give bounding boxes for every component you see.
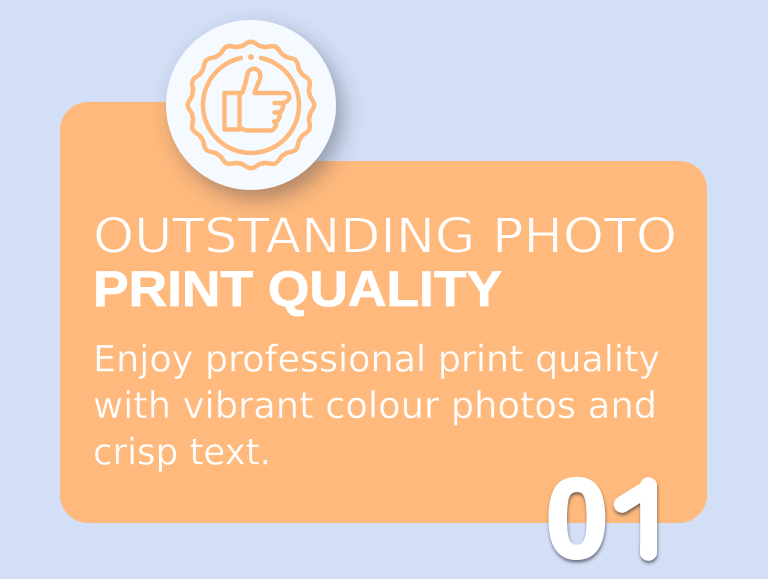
number 01: 0 <box>546 456 608 579</box>
body text: with vibrant colour photos and <box>93 384 657 427</box>
inner ring with gap <box>203 58 299 153</box>
heading <box>93 208 677 317</box>
panel: orange card <box>60 102 707 523</box>
number 01: 1 <box>616 456 679 579</box>
icon: thumbs-up quality badge <box>166 20 336 190</box>
heading line 2: PRINT QUALITY <box>93 261 502 317</box>
number 01 <box>546 476 660 566</box>
badge circle <box>166 20 336 190</box>
scalloped seal outline <box>188 42 314 168</box>
heading line 1: OUTSTANDING PHOTO <box>93 208 677 264</box>
body text: Enjoy professional print quality <box>93 338 660 381</box>
ring dot <box>248 54 254 60</box>
body text <box>93 338 660 473</box>
thumbs-up hand <box>224 69 289 130</box>
body text: crisp text. <box>93 430 271 473</box>
